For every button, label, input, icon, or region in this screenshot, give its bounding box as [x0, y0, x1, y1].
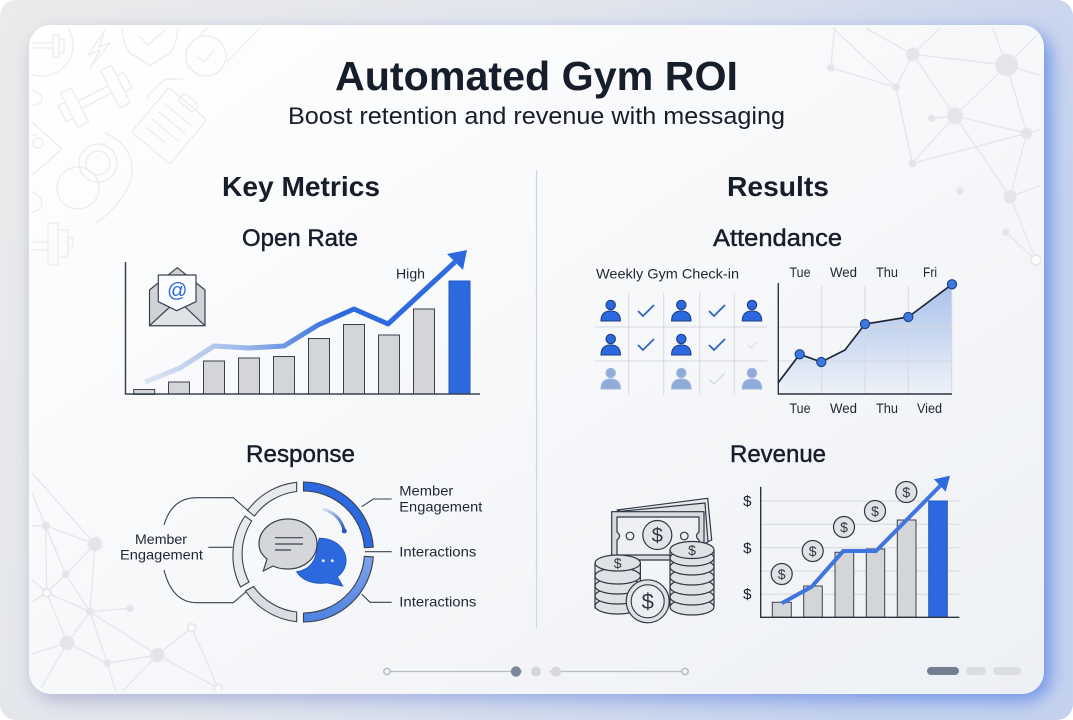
ring segments [233, 482, 373, 622]
panel: response [120, 441, 482, 622]
icon: front coin [626, 580, 669, 623]
check marks [638, 305, 757, 384]
label: member engagement right: Member [399, 483, 454, 499]
attendance line chart [778, 280, 957, 394]
dollar coins: $ [840, 519, 848, 535]
check-in people icons [601, 300, 762, 389]
chart axes [126, 262, 480, 394]
dollar coins: $ [902, 484, 910, 500]
top day labels: Thu [876, 264, 898, 280]
background pattern: gym icons [31, 28, 260, 266]
top day labels: Fri [923, 264, 937, 280]
revenue bars [772, 501, 947, 617]
axis dollar labels [743, 493, 752, 603]
title: Automated Gym ROI [335, 53, 738, 99]
heading: attendance: Attendance [713, 225, 842, 252]
icon: left coin stack [595, 555, 640, 614]
heading: response: Response [246, 441, 355, 468]
axis dollar labels: $ [743, 540, 752, 557]
panel: open rate [126, 225, 480, 394]
dollar coins: $ [809, 543, 817, 559]
trend arrow [145, 250, 467, 382]
heading: key metrics: Key Metrics [222, 171, 380, 202]
open rate bars [134, 281, 470, 394]
icon: front coin: $ [642, 589, 654, 614]
bottom day labels: Tue [790, 400, 811, 416]
label: member engagement right: Engagement [399, 498, 482, 514]
label: interactions middle: Interactions [399, 544, 476, 560]
icon: right coin stack: $ [688, 542, 696, 558]
heading: results: Results [727, 171, 829, 202]
bottom day labels: Wed [830, 400, 857, 416]
label: interactions lower: Interactions [399, 594, 476, 610]
bottom day labels: Thu [876, 400, 898, 416]
pill indicators [927, 667, 1021, 675]
dollar coins: $ [871, 503, 879, 519]
icon: blue chat bubble [297, 538, 346, 586]
bottom day labels: Vied [917, 400, 942, 416]
heading: open rate: Open Rate [242, 225, 358, 252]
axis dollar labels: $ [743, 493, 752, 510]
check-in table grid [595, 293, 767, 395]
dollar coins [771, 482, 917, 584]
dollar coins: $ [778, 566, 786, 582]
label: member engagement right [399, 483, 482, 514]
label: high: High [396, 266, 425, 282]
chart axes [761, 487, 959, 617]
icon: banknotes: $ [652, 525, 663, 547]
icon: email envelope: @ [167, 280, 187, 302]
bottom day labels [790, 400, 942, 416]
panel: revenue [595, 441, 959, 623]
label: member engagement left: Member [135, 531, 187, 547]
revenue grid lines [761, 501, 959, 594]
top day labels: Tue [790, 264, 811, 280]
background pattern: network top right [827, 26, 1042, 265]
icon: gray chat bubble [259, 519, 317, 571]
label: member engagement left: Engagement [120, 546, 203, 562]
icon: right coin stack [670, 542, 714, 615]
pagination slider [384, 666, 688, 677]
icon: left coin stack: $ [614, 555, 622, 571]
background pattern: network bottom left [32, 473, 222, 692]
icon: banknotes [612, 498, 712, 560]
divider [536, 170, 538, 628]
panel: attendance [595, 225, 957, 416]
icon: email envelope [150, 268, 205, 326]
heading: revenue: Revenue [730, 441, 826, 468]
icon: curved arc [323, 509, 347, 534]
top day labels [790, 264, 937, 280]
label: member engagement left [120, 531, 203, 562]
axis dollar labels: $ [743, 586, 752, 603]
label: weekly check-in: Weekly Gym Check-in [596, 266, 739, 282]
top day labels: Wed [830, 264, 857, 280]
trend arrow [782, 476, 950, 603]
subtitle: Boost retention and revenue with messaging [288, 103, 785, 130]
connector lines [164, 498, 392, 603]
